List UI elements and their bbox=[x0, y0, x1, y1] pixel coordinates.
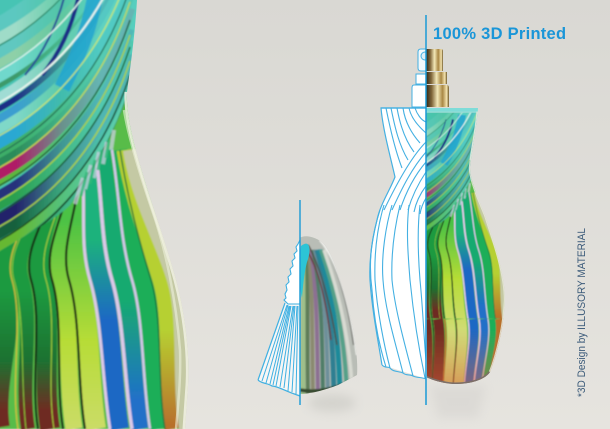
tall bottle: reflection bbox=[430, 386, 486, 418]
close-up of bottle texture bbox=[0, 0, 188, 429]
small bottle: cyan inner streak bbox=[300, 244, 309, 298]
heading: 100% 3D Printed: 100% 3D Printed bbox=[433, 25, 566, 43]
small bottle: printed half bbox=[300, 236, 357, 396]
spray pump: outlined half bbox=[412, 49, 429, 107]
small bottle: center line bbox=[299, 200, 301, 405]
spray pump: gold half bbox=[426, 49, 449, 107]
center dividing line bbox=[425, 15, 427, 405]
small bottle: wireframe half bbox=[258, 200, 300, 405]
credit: vertical text: *3D Design by ILLUSORY MATERIAL bbox=[576, 228, 588, 397]
small bottle: reflection bbox=[308, 394, 356, 412]
tall bottle: printed half bbox=[426, 108, 505, 384]
tall bottle: wireframe half bbox=[370, 108, 427, 379]
